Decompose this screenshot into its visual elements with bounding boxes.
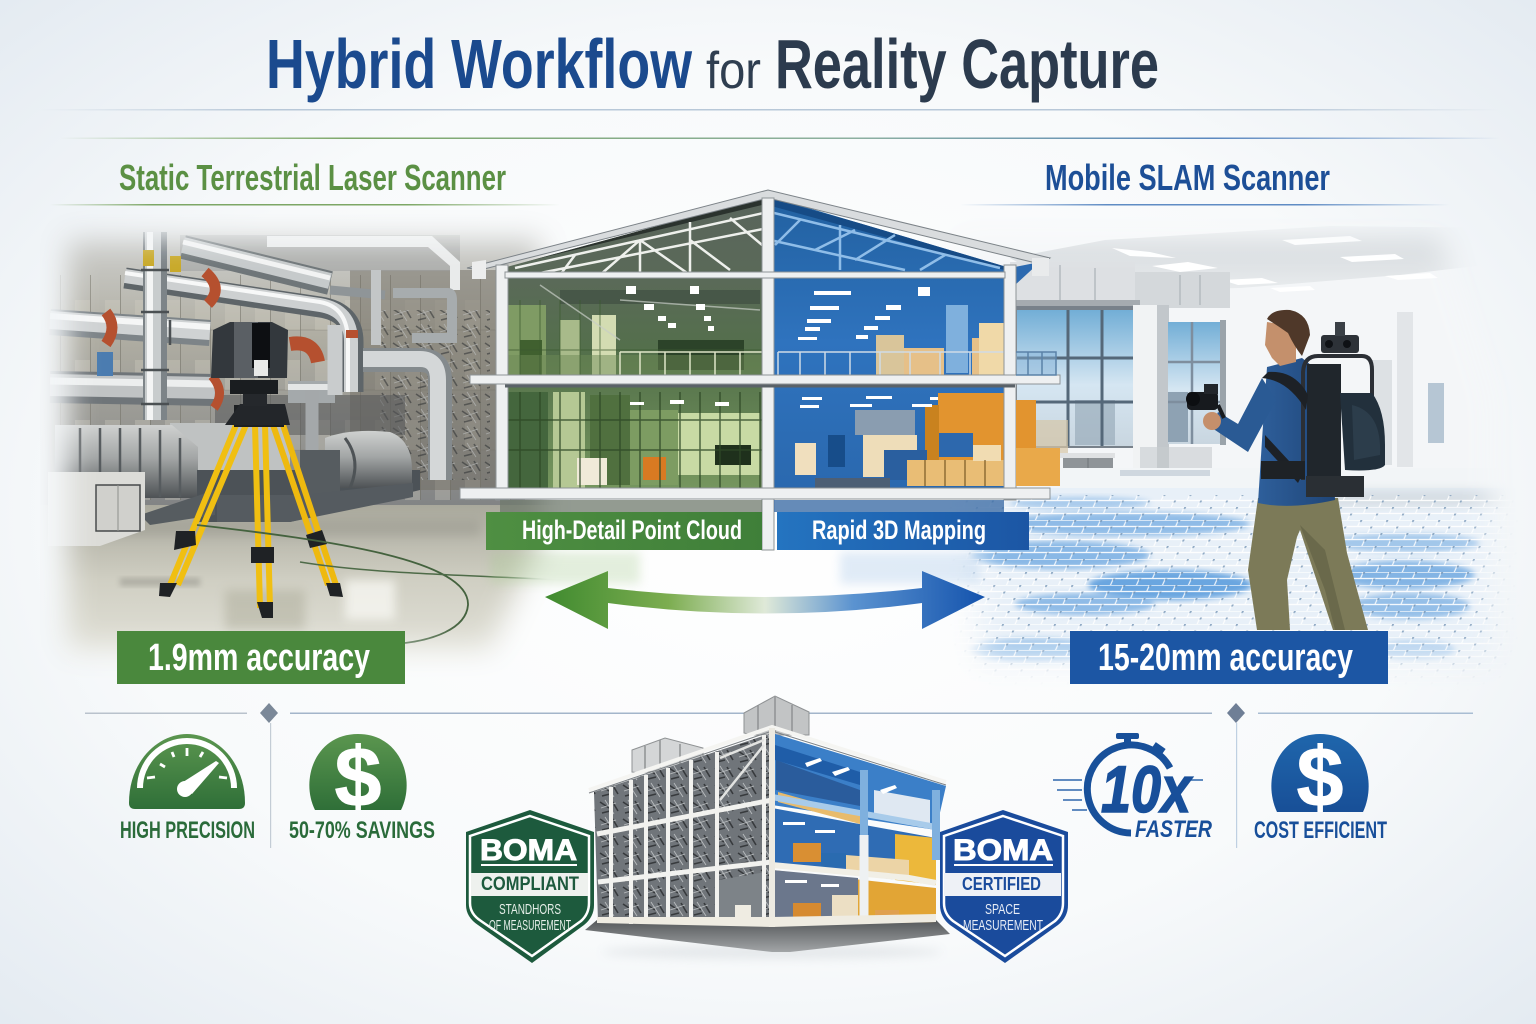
machinery right drum <box>217 431 413 522</box>
point cloud fringe under center building <box>490 552 980 584</box>
red flanges <box>106 272 352 408</box>
point cloud blobs <box>970 497 1480 662</box>
roof <box>467 190 1050 270</box>
laser scanner head <box>211 322 288 406</box>
icon: 10x stopwatch: 10x <box>1101 752 1193 826</box>
icon: precision gauge <box>129 734 245 809</box>
callout: 1.9mm accuracy: 1.9mm accuracy <box>148 637 370 679</box>
rooftop units <box>632 696 809 773</box>
plant wall <box>48 226 560 505</box>
badge: BOMA compliant: BOMA <box>480 834 577 867</box>
straps and belt <box>1262 372 1308 483</box>
ground shadow <box>602 945 942 959</box>
panel: left plant scene with laser scanner <box>48 226 560 660</box>
left glass face <box>594 733 772 926</box>
callout: 15-20mm accuracy: 15-20mm accuracy <box>1098 637 1353 679</box>
sub-floor band <box>500 500 1004 512</box>
upper boxes <box>876 335 904 375</box>
reception counter <box>1060 447 1212 468</box>
ceiling lights <box>798 287 938 408</box>
floor cable <box>197 525 468 643</box>
badge: BOMA compliant <box>466 810 594 963</box>
callout: 15-20mm accuracy <box>1070 631 1388 684</box>
right lower floor <box>772 870 936 926</box>
figure: SLAM operator with backpack <box>1186 310 1385 630</box>
right middle floor <box>772 808 936 884</box>
truss lines <box>524 200 762 262</box>
hanging lights <box>626 286 729 406</box>
lower divider with diamonds <box>85 703 1473 848</box>
far wall column and distant window <box>1370 312 1444 467</box>
title: for <box>706 42 761 100</box>
label: rapid 3D mapping: Rapid 3D Mapping <box>812 515 986 545</box>
brick grid overlay <box>961 495 1508 678</box>
label: high-detail point cloud: High-Detail Point Cloud <box>522 515 742 545</box>
panel: bottom building cutaway <box>585 696 950 959</box>
text: high precision: HIGH PRECISION <box>120 817 255 844</box>
backpack frame and bag <box>1303 356 1372 480</box>
scanner on backpack <box>1321 322 1359 353</box>
badge: BOMA compliant: COMPLIANT <box>481 874 579 895</box>
title: Hybrid Workflow <box>266 25 692 103</box>
lower boxes <box>938 393 1004 460</box>
tripod <box>159 404 343 618</box>
pipe network <box>50 232 452 480</box>
torso <box>1258 358 1335 506</box>
panel: center building cutaway <box>460 190 1060 550</box>
left face frame <box>611 735 764 926</box>
icon: 10x stopwatch <box>1053 733 1213 843</box>
badge: BOMA compliant: OF MEASUREMENT <box>489 917 571 934</box>
right balcony extension <box>1016 352 1056 375</box>
badge: BOMA certified: MEASUREMENT <box>963 917 1043 934</box>
large window <box>1012 306 1136 448</box>
left half: green point cloud interior <box>508 200 762 488</box>
icon: green dollar: $ <box>335 730 381 824</box>
title: Reality Capture <box>775 25 1159 103</box>
ceiling light panels <box>1112 236 1438 292</box>
yellow valves <box>143 250 181 272</box>
right half: blue mapped interior <box>774 200 1004 488</box>
badge: BOMA certified: BOMA <box>953 834 1053 867</box>
structural frame <box>460 198 1060 550</box>
text: 50-70% savings: 50-70% SAVINGS <box>289 817 435 844</box>
roof slab <box>589 727 946 790</box>
railing <box>619 351 762 374</box>
header divider lines <box>40 109 1500 139</box>
badge: BOMA certified <box>940 810 1068 963</box>
label: rapid 3D mapping <box>777 512 1029 550</box>
icon: blue dollar <box>1271 730 1369 824</box>
arm <box>1212 378 1276 452</box>
columns and grey wall <box>1133 305 1157 448</box>
machinery behind pipes <box>55 423 420 525</box>
second window <box>1168 320 1226 445</box>
office floor <box>1063 468 1212 488</box>
heading: static terrestrial laser scanner: Static Terrestrial Laser Scanner <box>119 157 506 198</box>
plant floor <box>51 505 552 660</box>
translucent boxes beside building <box>1036 420 1068 456</box>
back wall band <box>1010 262 1230 308</box>
floor slab <box>597 914 936 927</box>
icon: green dollar <box>309 734 407 810</box>
ceiling <box>1010 229 1452 288</box>
text: cost efficient: COST EFFICIENT <box>1254 817 1387 844</box>
lower right boxes outside frame <box>1016 400 1060 486</box>
corner column <box>769 728 775 927</box>
head <box>1265 310 1310 366</box>
arrow: two-way green to blue <box>545 571 985 629</box>
heading: mobile SLAM scanner: Mobile SLAM Scanner <box>1045 157 1330 198</box>
label: high-detail point cloud <box>486 512 762 550</box>
icon: 10x stopwatch: FASTER <box>1135 816 1213 843</box>
trusses <box>770 202 1010 268</box>
badge: BOMA certified: CERTIFIED <box>962 874 1041 894</box>
hand <box>1203 412 1221 430</box>
white cabinet <box>48 472 145 546</box>
upper floor lime glass <box>508 305 546 377</box>
lower floor lime glass <box>508 392 548 488</box>
trousers <box>1248 498 1368 630</box>
pipe collars <box>141 270 170 404</box>
panel: right office scene with SLAM operator <box>958 228 1510 678</box>
camera <box>1186 384 1224 418</box>
badge: BOMA compliant: STANDHORS <box>499 901 561 918</box>
title <box>266 25 1159 103</box>
right blue top floors <box>772 733 946 830</box>
right face frame <box>772 797 936 827</box>
callout: 1.9mm accuracy <box>117 631 405 684</box>
icon: blue dollar: $ <box>1297 730 1343 824</box>
concrete base <box>585 920 950 952</box>
badge: BOMA certified: SPACE <box>985 901 1020 918</box>
